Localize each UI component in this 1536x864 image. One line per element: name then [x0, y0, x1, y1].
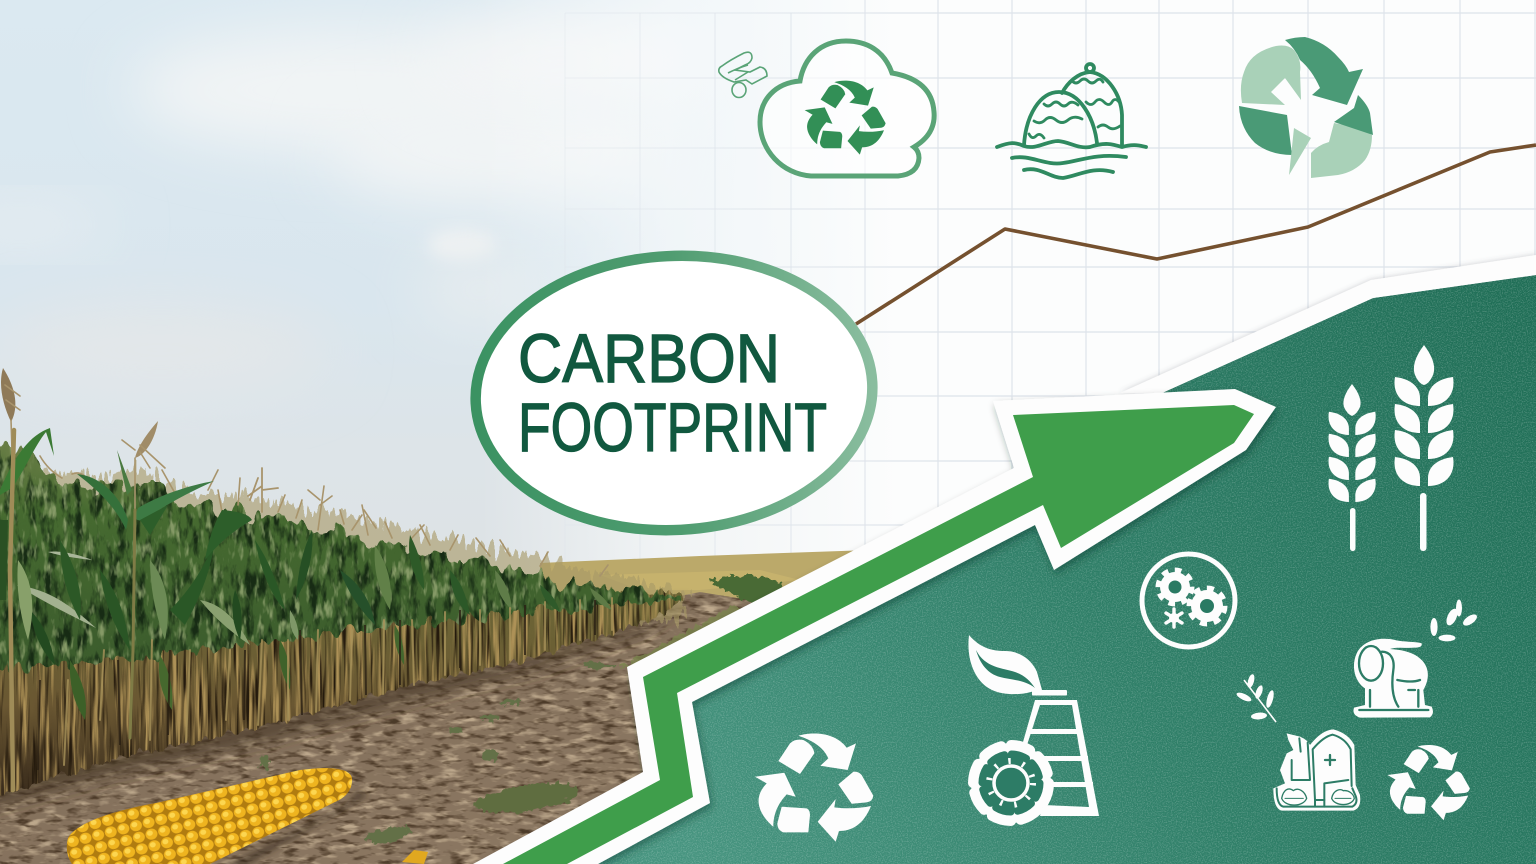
grass strip by the road: [620, 605, 745, 668]
icon: recycling symbol small: [1387, 745, 1470, 820]
icon: gears in circle: [1142, 554, 1235, 647]
callout: carbon footprint: [469, 246, 879, 540]
corn cob: [67, 768, 428, 864]
foreground corn leaves: [0, 428, 612, 720]
white upper band of the panel: [1120, 255, 1536, 393]
green panel with texture: [590, 275, 1536, 864]
dirt shadow under row: [0, 600, 690, 810]
icon: large two-tone recycling symbol: [1239, 37, 1373, 178]
wheat left: [1329, 384, 1376, 551]
title: CARBON: [518, 320, 780, 397]
brown trend line: [856, 145, 1536, 324]
grass tufts: [260, 662, 616, 846]
arrow white outline: [473, 389, 1276, 864]
wheat right: [1395, 345, 1453, 551]
far corn patch: [708, 576, 782, 606]
title: FOOTPRINT: [518, 389, 827, 466]
icon: wheat stalks: [1329, 345, 1453, 551]
icon: cloud with recycling arrows: [760, 41, 934, 176]
foliage band: [0, 446, 684, 672]
foreground stalks: [10, 430, 612, 790]
photo: corn field: [0, 368, 870, 864]
rising arrow: [473, 389, 1276, 864]
icon: hay bales on water: [997, 64, 1146, 178]
chart grid: [565, 0, 1536, 560]
icon: sprig: [1235, 673, 1276, 722]
ground soil: [0, 570, 870, 864]
icon: clinic and food bowls: [1273, 729, 1360, 811]
icon: machine roller: [1353, 639, 1433, 718]
arrow green fill: [503, 405, 1254, 864]
sky background: [0, 0, 1536, 600]
icon: small leaves near machine: [1430, 600, 1479, 641]
icon: scribble tubes: [719, 52, 767, 98]
icon: factory with leaf and gear: [968, 635, 1099, 823]
stalk band: [0, 592, 684, 805]
distant field: [540, 550, 870, 640]
title: [518, 320, 827, 466]
gear wheel: [971, 743, 1051, 823]
icon: recycling symbol large: [755, 733, 873, 842]
tassels: [1, 368, 608, 576]
tassel band behind the row: [0, 468, 684, 620]
